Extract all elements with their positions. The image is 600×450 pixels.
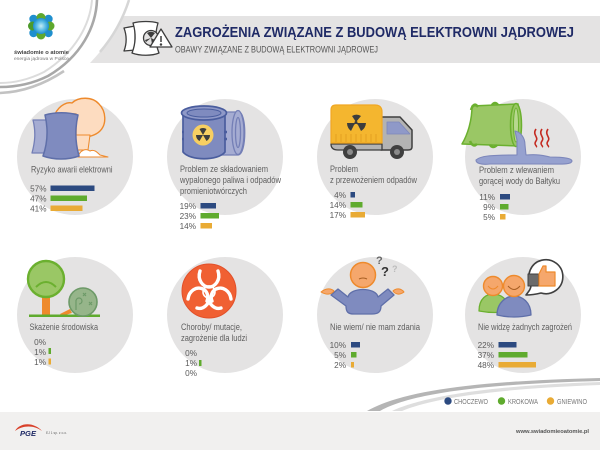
bars: 5%	[483, 213, 495, 222]
icon: mushroom cloud and cooling towers	[32, 98, 108, 159]
bars: 47%	[30, 194, 46, 204]
legend: CHOCZEWO	[454, 397, 488, 406]
panel: ryzyko awarii elektrowni	[17, 98, 133, 215]
bars: 19%	[180, 202, 196, 211]
icon: sad tree and fallen tree	[28, 261, 100, 317]
logo: świadomie o atomie: świadomie o atomie	[14, 50, 70, 56]
panel: nie wiem	[317, 255, 433, 373]
logo: PGE	[15, 424, 67, 438]
logo: świadomie o atomie: energia jądrowa w Polsce	[14, 56, 70, 61]
text: Choroby/ mutacje,	[181, 322, 242, 332]
text: Nie widzę żadnych zagrożeń	[478, 322, 572, 332]
bars	[479, 193, 510, 222]
icon: shrugging person: ?	[381, 264, 389, 279]
bars	[185, 349, 202, 378]
panel: choroby, mutacje: zagrożenie dla ludzi	[181, 333, 247, 343]
panel: gorąca woda do Bałtyku: gorącej wody do Bałtyku	[479, 176, 560, 186]
bars: 14%	[330, 201, 346, 210]
bars: 9%	[483, 203, 495, 212]
bars: 5%	[334, 351, 346, 360]
panel: gorąca woda do Bałtyku	[462, 99, 581, 222]
bars: 57%	[30, 184, 46, 194]
header band	[88, 16, 600, 63]
bars: 1%	[185, 359, 197, 368]
panel: przewożenie odpadów	[317, 99, 433, 220]
bars: 10%	[330, 341, 346, 350]
text: Problem z wlewaniem	[479, 165, 554, 175]
bars: 0%	[185, 369, 197, 378]
bottom swoosh	[367, 378, 600, 411]
website: www.swiadomieoatomie.pl	[515, 429, 589, 435]
text: Problem ze składowaniem	[180, 164, 268, 174]
icon: radioactive barrels	[182, 106, 245, 159]
bars	[478, 341, 536, 370]
footer band	[0, 412, 600, 450]
legend	[444, 397, 587, 406]
bars: 22%	[478, 341, 494, 350]
text: Skażenie środowiska	[30, 322, 98, 332]
bars: 14%	[180, 222, 196, 231]
icon: truck	[331, 105, 412, 159]
logo: PGE: EJ 1 sp. z o.o.	[46, 431, 67, 435]
bars: 11%	[479, 193, 495, 202]
panel: przewożenie odpadów: z przewożeniem odpadów	[330, 175, 418, 185]
bars	[330, 191, 365, 220]
panel: składowanie paliwa	[167, 99, 283, 231]
bars: 1%	[34, 358, 46, 367]
text: Ryzyko awarii elektrowni	[31, 164, 113, 174]
bars	[34, 338, 51, 367]
icon: biohazard	[182, 264, 236, 318]
panel: nie widzę zagrożeń	[465, 257, 581, 373]
bars: 1%	[34, 348, 46, 357]
panel: choroby, mutacje	[167, 257, 283, 378]
bars: 23%	[180, 212, 196, 221]
bars	[180, 202, 219, 231]
text: Nie wiem/ nie mam zdania	[330, 322, 420, 332]
icon: shrugging person	[321, 255, 404, 314]
logo: świadomie o atomie	[14, 13, 70, 61]
bars: 4%	[334, 191, 346, 200]
panel: składowanie paliwa: promieniotwórczych	[180, 186, 247, 196]
text: Problem	[330, 164, 358, 174]
bars: 0%	[185, 349, 197, 358]
icon: tipped barrel and hot water	[462, 103, 572, 164]
bars: 48%	[478, 361, 494, 370]
logo: PGE: PGE	[20, 429, 37, 438]
bars: 17%	[330, 211, 346, 220]
panel: składowanie paliwa: wypalonego paliwa i odpadów	[179, 175, 282, 185]
bars	[330, 341, 360, 370]
legend: GNIEWINO	[557, 397, 587, 406]
icon: people with thumbs up	[479, 260, 563, 317]
bars: 0%	[34, 338, 46, 347]
icon: shrugging person: ?	[376, 255, 383, 267]
bars: 37%	[478, 351, 494, 360]
icon: shrugging person: ?	[392, 264, 398, 274]
subtitle: OBAWY ZWIĄZANE Z BUDOWĄ ELEKTROWNI JĄDROWEJ	[175, 44, 378, 54]
top-left swoosh	[0, 0, 129, 96]
bars: 41%	[30, 204, 46, 214]
header icon: cooling towers with warning	[124, 22, 172, 55]
panel: skażenie środowiska	[17, 257, 133, 373]
legend: KROKOWA	[508, 397, 539, 406]
bars: 2%	[334, 361, 346, 370]
bars	[30, 184, 94, 214]
